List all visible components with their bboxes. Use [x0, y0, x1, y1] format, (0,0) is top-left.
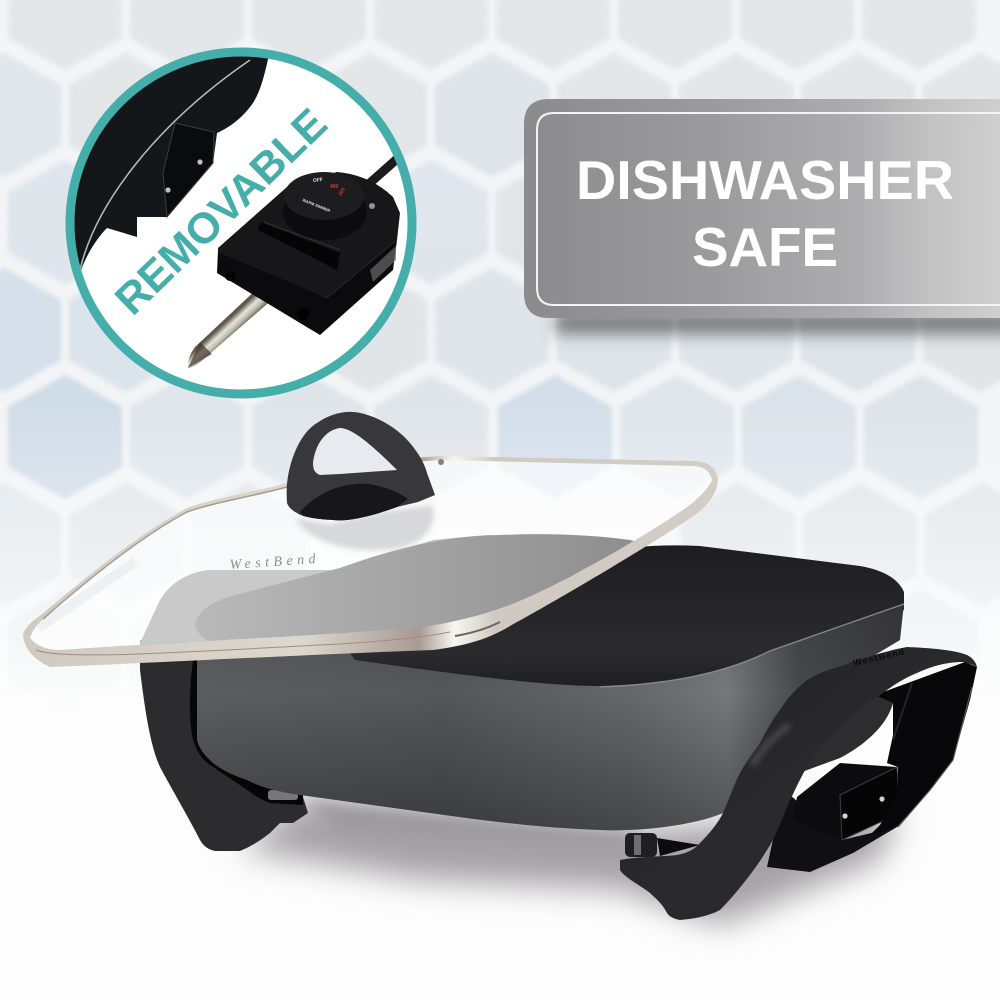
black recess beside left foot — [190, 660, 303, 805]
temperature dial: 400 — [330, 184, 339, 190]
circle ring — [70, 52, 412, 394]
connector block under handle — [793, 763, 900, 840]
pan outer body — [197, 603, 904, 830]
background seen through knob opening — [313, 428, 397, 475]
lid metal rim — [23, 456, 718, 667]
lid rivet — [438, 459, 444, 465]
right foot post — [625, 833, 700, 857]
temperature probe — [188, 294, 268, 368]
chrome foot left — [268, 790, 298, 800]
temperature dial: WARM SIMMER — [302, 197, 331, 213]
lid knob — [287, 412, 435, 520]
floor shadow under skillet — [240, 800, 900, 925]
banner heading: SAFE — [692, 216, 838, 278]
temperature dial: OFF — [313, 177, 323, 184]
left foot/handle — [140, 640, 308, 851]
removable label: REMOVABLE — [106, 99, 336, 324]
lid brand mark: WestBend — [229, 552, 317, 573]
temperature dial: 200 — [338, 187, 347, 197]
pan tail behind handle — [780, 695, 893, 780]
lower connector bracket — [767, 795, 897, 872]
right handle arm — [620, 647, 977, 920]
skillet — [23, 412, 977, 920]
lid handle reflection — [295, 505, 434, 550]
lid see-through reflections — [140, 534, 634, 645]
skillet handle close-up — [74, 56, 268, 270]
handle brand mark: WestBend — [852, 647, 905, 668]
banner heading — [576, 149, 954, 278]
power cord — [367, 156, 397, 184]
lid glass fill — [30, 460, 712, 650]
controller box — [217, 172, 400, 335]
banner heading: DISHWASHER — [576, 149, 954, 211]
banner: dishwasher safe — [524, 99, 1000, 334]
temperature dial — [283, 172, 367, 240]
inset circle: removable temperature control — [60, 40, 412, 394]
right handle inner — [870, 662, 977, 835]
pan interior — [340, 545, 904, 700]
